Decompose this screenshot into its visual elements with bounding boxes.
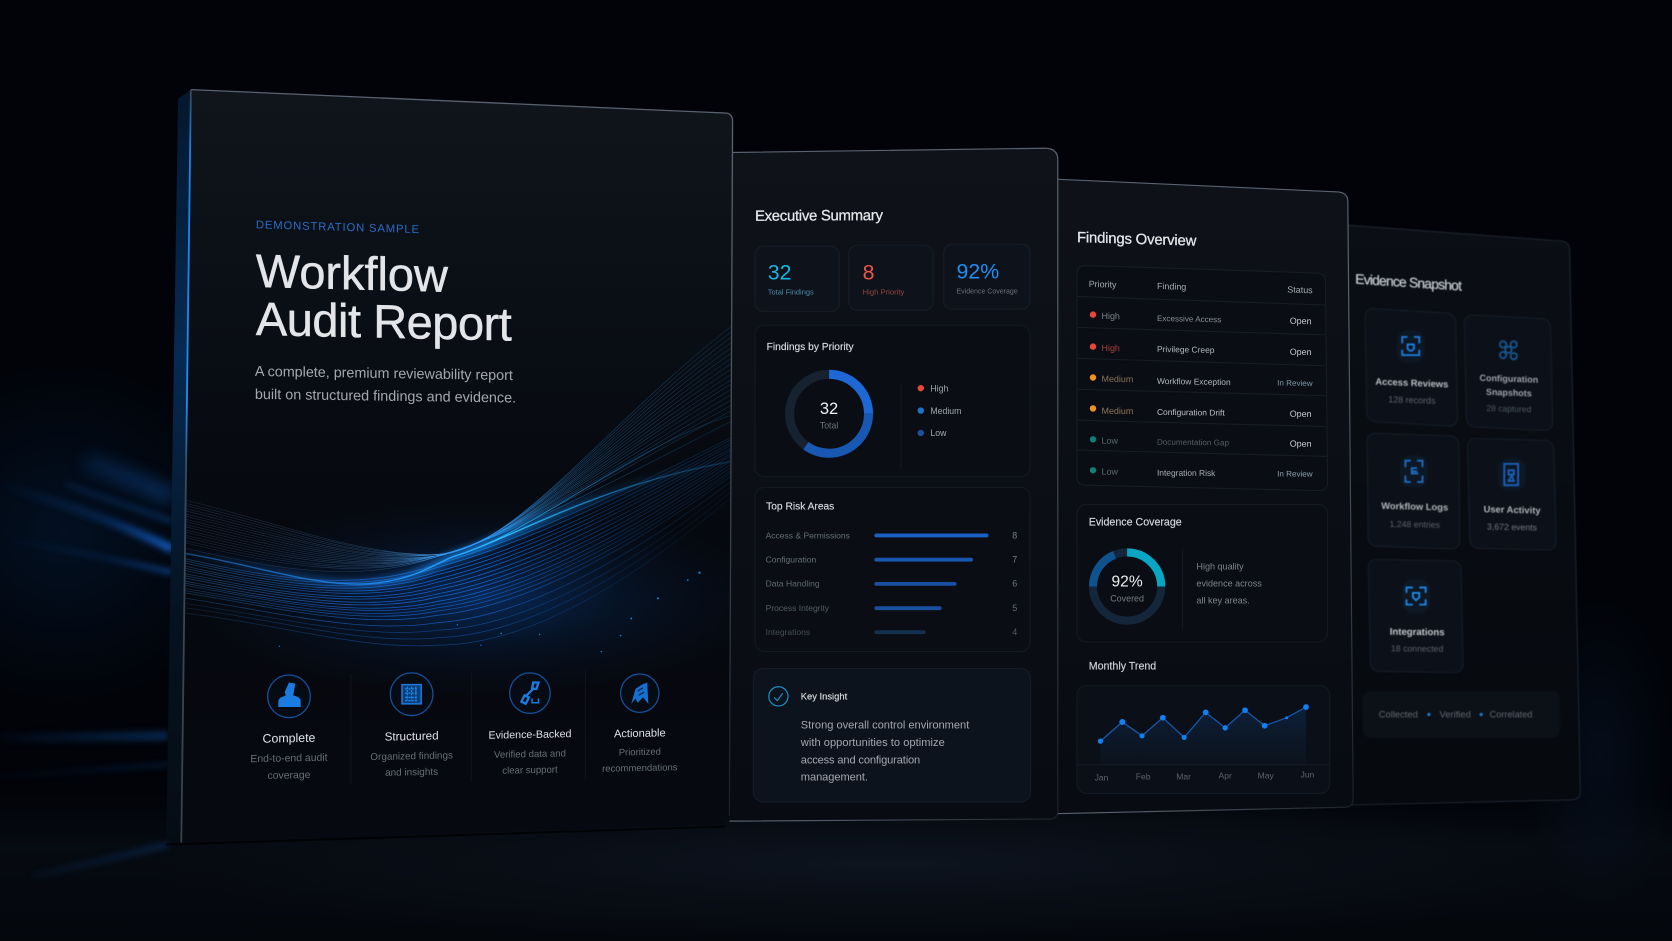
callout body	[800, 719, 969, 784]
table header: Status	[1287, 285, 1313, 295]
bar: data handling	[766, 579, 1017, 589]
panel surface	[1056, 179, 1353, 814]
cover surface	[181, 90, 733, 842]
line chart: monthly trend	[1077, 686, 1330, 793]
cover bottom shadow edge	[166, 826, 725, 845]
coverage note: all key areas.	[1196, 596, 1250, 606]
row: documentation gap	[1090, 436, 1312, 449]
month labels: Apr	[1219, 770, 1232, 780]
panel: findings overview	[1056, 179, 1353, 814]
bar: integrations: Integrations	[766, 627, 810, 637]
card: evidence coverage	[1077, 504, 1328, 642]
bar: integrations	[766, 627, 1017, 637]
callout: key insight	[753, 669, 1031, 802]
caption: Total Findings	[768, 287, 814, 296]
donut: total findings	[790, 374, 869, 453]
bar: process integrity: 5	[1012, 603, 1017, 613]
description	[494, 748, 566, 777]
row: excessive access: Excessive Access	[1157, 314, 1221, 324]
callout body: Strong overall control environment	[801, 719, 969, 731]
wave particles	[279, 571, 701, 652]
feature: structured	[370, 673, 453, 779]
month labels: May	[1258, 770, 1275, 780]
light streaks behind cover	[0, 461, 173, 877]
panel: report cover	[166, 90, 768, 845]
bar: process integrity	[766, 603, 1017, 613]
description: Prioritized	[619, 747, 661, 758]
heading: Findings Overview	[1077, 229, 1197, 250]
month labels: Jan	[1095, 773, 1109, 783]
donut caption: Total	[820, 421, 838, 431]
row: excessive access: High	[1102, 311, 1120, 321]
bar: data handling: Data Handling	[766, 579, 820, 589]
description: Verified data and	[494, 748, 566, 761]
status: correlated: Correlated	[1490, 710, 1532, 720]
label: Structured	[385, 730, 439, 744]
panel rim	[1056, 179, 1353, 814]
row: workflow exception: Medium	[1102, 374, 1133, 384]
donut value: 92%	[1112, 574, 1143, 591]
status: collected: Collected	[1379, 710, 1418, 720]
stat card: high priority	[849, 245, 933, 310]
icon: integrations	[1402, 579, 1430, 613]
feature: complete	[250, 675, 328, 782]
legend: Medium	[930, 406, 961, 416]
bar: access and permissions: Access & Permissions	[766, 531, 850, 541]
stat card: total findings	[755, 246, 839, 311]
label: Complete	[263, 731, 316, 746]
legend: Low	[930, 428, 947, 438]
coverage note: evidence across	[1196, 579, 1262, 589]
row: integration risk: Integration Risk	[1157, 468, 1216, 478]
table header	[1089, 279, 1313, 295]
bar: access and permissions	[766, 531, 1017, 541]
description	[602, 747, 678, 775]
card: user activity	[1467, 438, 1556, 550]
label: Actionable	[614, 727, 666, 740]
description: Organized findings	[370, 750, 453, 763]
description	[370, 750, 453, 779]
status: verified: Verified	[1440, 710, 1471, 720]
card: findings by priority	[755, 325, 1030, 477]
bar: configuration: Configuration	[766, 555, 817, 565]
row: configuration drift	[1090, 405, 1312, 419]
description	[250, 753, 328, 782]
count: 28 captured	[1486, 403, 1532, 414]
icon: check mark	[769, 687, 788, 706]
feature: actionable	[602, 674, 678, 775]
label: Integrations	[1390, 627, 1445, 638]
label: User Activity	[1484, 504, 1541, 516]
row: workflow exception: Workflow Exception	[1157, 376, 1231, 387]
panel surface	[1346, 225, 1580, 805]
count: 1,248 entries	[1389, 519, 1441, 530]
label: Evidence-Backed	[489, 728, 571, 742]
heading: Evidence Snapshot	[1355, 271, 1462, 294]
row: privilege creep: Privilege Creep	[1157, 344, 1215, 355]
bar: integrations: 4	[1012, 627, 1017, 637]
legend	[918, 383, 961, 438]
row: privilege creep: High	[1102, 343, 1120, 353]
panel: evidence snapshot	[1346, 225, 1580, 805]
title: Audit Report	[256, 293, 512, 350]
row: workflow exception: In Review	[1277, 379, 1313, 388]
subtitle	[255, 364, 516, 406]
row: excessive access: Open	[1290, 316, 1312, 326]
card: workflow logs	[1367, 433, 1460, 549]
icon: grid	[390, 673, 433, 716]
subtitle: built on structured findings and evidence.	[255, 387, 516, 406]
description: clear support	[502, 765, 558, 777]
icon: action flag	[621, 674, 659, 712]
month labels	[1095, 769, 1314, 783]
row: configuration drift: Medium	[1102, 406, 1133, 416]
wave secondary highlight	[481, 416, 730, 546]
panel rim	[729, 148, 1058, 821]
description: and insights	[385, 767, 438, 779]
row: documentation gap: Open	[1290, 439, 1312, 449]
feature: evidence-backed	[489, 673, 571, 777]
wave highlight glow	[186, 462, 729, 584]
spine light edge	[181, 90, 191, 842]
row: documentation gap: Documentation Gap	[1157, 438, 1229, 447]
label: Access Reviews	[1375, 377, 1448, 389]
row: integration risk	[1090, 467, 1313, 479]
caption: High Priority	[863, 287, 905, 296]
value: 32	[768, 260, 791, 284]
month labels: Feb	[1136, 772, 1151, 782]
card: integrations	[1368, 559, 1463, 673]
callout body: management.	[801, 772, 868, 784]
description: End-to-end audit	[250, 753, 328, 765]
bar: access and permissions: 8	[1012, 531, 1017, 541]
legend: High	[930, 383, 948, 393]
heading: Executive Summary	[755, 207, 883, 225]
label second line: Snapshots	[1486, 387, 1532, 398]
bar: data handling: 6	[1012, 579, 1017, 589]
bar: process integrity: Process Integrity	[766, 603, 830, 613]
bar: configuration	[766, 555, 1017, 565]
icon: linked evidence	[510, 673, 550, 713]
row: workflow exception	[1090, 374, 1313, 388]
cover rim	[191, 90, 733, 816]
month labels: Jun	[1300, 769, 1314, 779]
wave highlight	[186, 462, 729, 584]
card: top risk areas	[755, 487, 1030, 652]
stat card: evidence coverage	[944, 244, 1030, 309]
count: 128 records	[1388, 394, 1436, 406]
card heading: Evidence Coverage	[1089, 517, 1182, 529]
count: 18 connected	[1391, 643, 1444, 654]
icon: workflow logs	[1400, 455, 1428, 487]
icon: configuration	[1500, 341, 1517, 359]
coverage note: High quality	[1196, 561, 1244, 571]
row: privilege creep	[1090, 343, 1312, 357]
row: configuration drift: Configuration Drift	[1157, 407, 1225, 418]
card heading: Top Risk Areas	[766, 502, 834, 513]
row: integration risk: In Review	[1277, 469, 1313, 479]
panel: executive summary	[729, 148, 1058, 821]
status dot	[1480, 713, 1483, 716]
subtitle: A complete, premium reviewability report	[255, 364, 513, 384]
card: configuration snapshots	[1464, 315, 1553, 431]
card heading: Findings by Priority	[767, 342, 854, 353]
value: 92%	[956, 259, 999, 283]
title	[256, 245, 512, 350]
donut: 92 percent covered	[1093, 552, 1161, 621]
row: configuration drift: Open	[1290, 409, 1312, 419]
donut value: 32	[820, 399, 838, 418]
eyebrow: DEMONSTRATION SAMPLE	[256, 219, 420, 236]
count: 3,672 events	[1487, 522, 1538, 533]
icon: person	[268, 675, 310, 718]
description: recommendations	[602, 762, 678, 775]
cover spine	[166, 90, 191, 842]
callout heading: Key Insight	[801, 692, 848, 702]
callout body: access and configuration	[801, 755, 920, 767]
heading: monthly trend: Monthly Trend	[1089, 661, 1156, 673]
value: 8	[863, 260, 875, 284]
panel surface	[729, 148, 1058, 821]
row: documentation gap: Low	[1102, 436, 1118, 446]
description: coverage	[268, 770, 311, 782]
coverage note	[1196, 561, 1262, 606]
bar: configuration: 7	[1012, 555, 1017, 565]
table header: Finding	[1157, 281, 1186, 292]
donut caption: Covered	[1110, 593, 1144, 603]
row: privilege creep: Open	[1290, 347, 1312, 357]
caption: Evidence Coverage	[956, 288, 1018, 295]
table	[1077, 266, 1328, 491]
footer status strip	[1363, 691, 1560, 738]
month labels: Mar	[1176, 772, 1191, 782]
wave artwork	[186, 326, 731, 674]
icon: access reviews	[1397, 331, 1425, 363]
icon: user activity	[1498, 459, 1526, 491]
label: Configuration	[1480, 373, 1538, 385]
card: access reviews	[1365, 308, 1458, 427]
status dot	[1427, 713, 1430, 716]
title: Workflow	[256, 245, 448, 302]
label: Workflow Logs	[1381, 501, 1448, 513]
row: integration risk: Low	[1102, 467, 1118, 477]
callout body: with opportunities to optimize	[800, 737, 945, 749]
row: excessive access	[1090, 311, 1312, 326]
table header: Priority	[1089, 279, 1117, 290]
